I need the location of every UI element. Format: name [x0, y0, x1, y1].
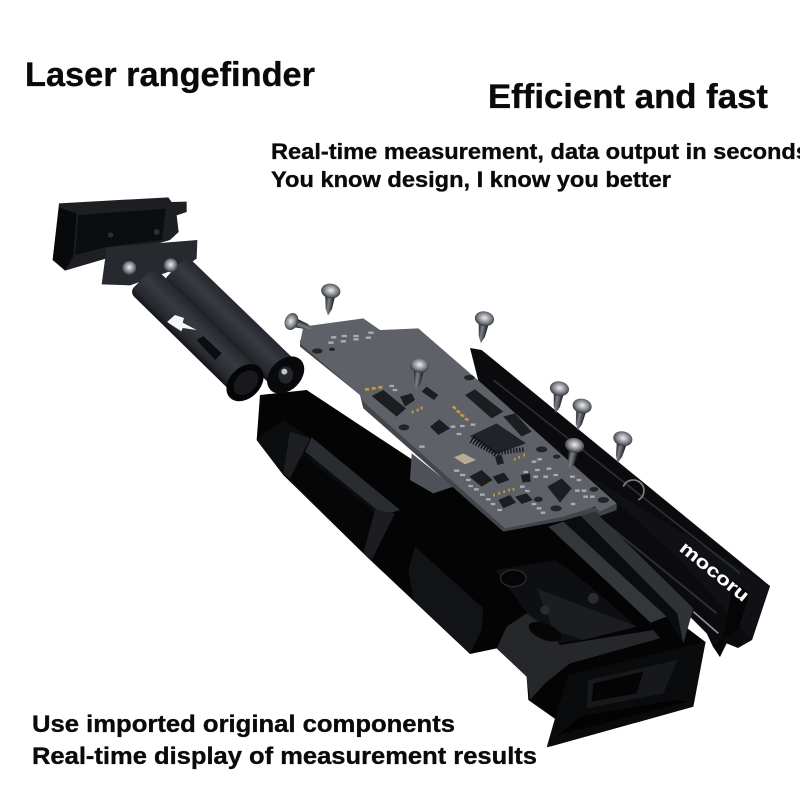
- text block: real-time measurement: [271, 139, 800, 192]
- lens barrel under board: [410, 453, 453, 493]
- gold pads: [365, 387, 525, 495]
- board top: [300, 318, 617, 528]
- housing body: [257, 390, 705, 747]
- front bezel: [547, 642, 706, 747]
- caption: components and display: Use imported original components: [32, 711, 455, 738]
- caption: components and display: [32, 711, 537, 770]
- icon: switch: [197, 336, 222, 360]
- gray inner rails: [548, 512, 693, 643]
- heading: Efficient and fast: Efficient and fast: [488, 78, 768, 116]
- inner frame details: [495, 560, 637, 643]
- side wall highlight: [257, 420, 400, 560]
- small chips: [372, 387, 572, 508]
- mounting nuts: [122, 258, 178, 275]
- battery door: [408, 547, 483, 653]
- back plate: [53, 197, 187, 271]
- icon: lightning bolt: [167, 315, 197, 331]
- lens housing: [497, 613, 660, 700]
- front plate: [102, 240, 197, 285]
- battery assembly: [53, 197, 312, 409]
- mounting holes: [312, 348, 609, 511]
- silver pads: [328, 333, 595, 513]
- text block: real-time measurement: Real-time measurement, data output in seconds: [271, 139, 800, 164]
- rear rail with brand: mocoru: [676, 538, 753, 606]
- caption: components and display: Real-time display of measurement results: [32, 743, 537, 770]
- front cylinder: [129, 267, 271, 409]
- lens slot: [526, 618, 564, 646]
- main housing: [257, 348, 770, 747]
- crystal: [454, 453, 476, 464]
- loose screws: [282, 282, 634, 465]
- circuit board: [282, 282, 634, 532]
- screws on board: [406, 357, 585, 471]
- text block: real-time measurement: You know design, I know you better: [271, 167, 671, 192]
- rear rail with brand: [470, 348, 770, 657]
- board edge: [300, 340, 617, 532]
- rear cylinder: [163, 256, 312, 401]
- main chip: [470, 423, 526, 457]
- title: Laser rangefinder: Laser rangefinder: [25, 56, 315, 94]
